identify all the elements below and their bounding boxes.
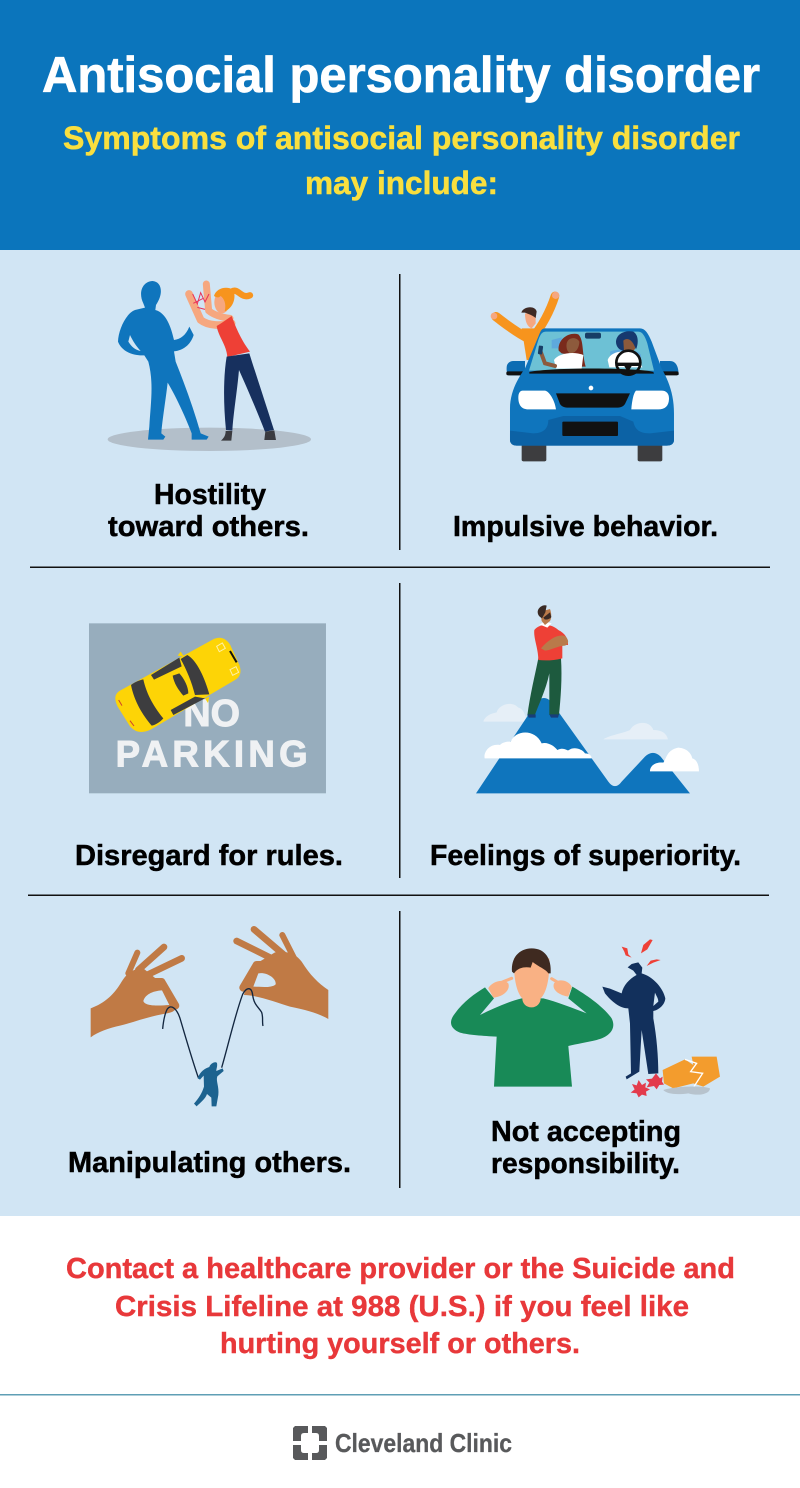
logo: Cleveland Clinic (293, 1426, 512, 1460)
subtitle: Symptoms of antisocial personality disorder (63, 120, 740, 156)
label: Feelings of superiority. (430, 840, 741, 872)
callout: crisis message (66, 1253, 735, 1360)
label (491, 1116, 681, 1180)
icon: logo mark (293, 1426, 327, 1460)
icon: man covering ears and angry figure (451, 939, 720, 1097)
logo wordmark: Cleveland Clinic (335, 1428, 512, 1458)
panel: not accepting responsibility (451, 939, 720, 1180)
icon: taxi on no parking sign: PARKING (116, 734, 308, 775)
icon: man on mountain (476, 605, 699, 793)
symptoms panel background (0, 250, 800, 1216)
header band (0, 0, 800, 250)
title: Antisocial personality disorder (42, 47, 760, 103)
label: Manipulating others. (68, 1147, 351, 1179)
panel: disregard for rules (75, 623, 343, 872)
label: Not accepting (491, 1116, 681, 1148)
label: toward others. (108, 511, 309, 543)
label: responsibility. (491, 1148, 680, 1180)
subtitle (63, 120, 740, 201)
icon: car with passengers (491, 292, 679, 461)
icon: arguing couple (108, 281, 311, 451)
panel: hostility toward others (108, 281, 311, 543)
label: Hostility (154, 479, 266, 511)
panel: feelings of superiority (430, 605, 741, 872)
icon: hands with puppet strings (91, 929, 328, 1106)
callout: crisis message: hurting yourself or others. (220, 1328, 580, 1360)
subtitle: may include: (305, 165, 498, 201)
callout: crisis message: Contact a healthcare provider or the Suicide and (66, 1253, 735, 1285)
panel: impulsive behavior (453, 292, 718, 543)
label: Impulsive behavior. (453, 511, 718, 543)
panel: manipulating others (68, 929, 351, 1179)
callout: crisis message: Crisis Lifeline at 988 (U.S.) if you feel like (115, 1291, 689, 1323)
label (108, 479, 309, 543)
footer background (0, 1216, 800, 1488)
icon: taxi on no parking sign (89, 623, 326, 793)
icon: taxi on no parking sign: NO (183, 693, 240, 735)
label: Disregard for rules. (75, 840, 343, 872)
